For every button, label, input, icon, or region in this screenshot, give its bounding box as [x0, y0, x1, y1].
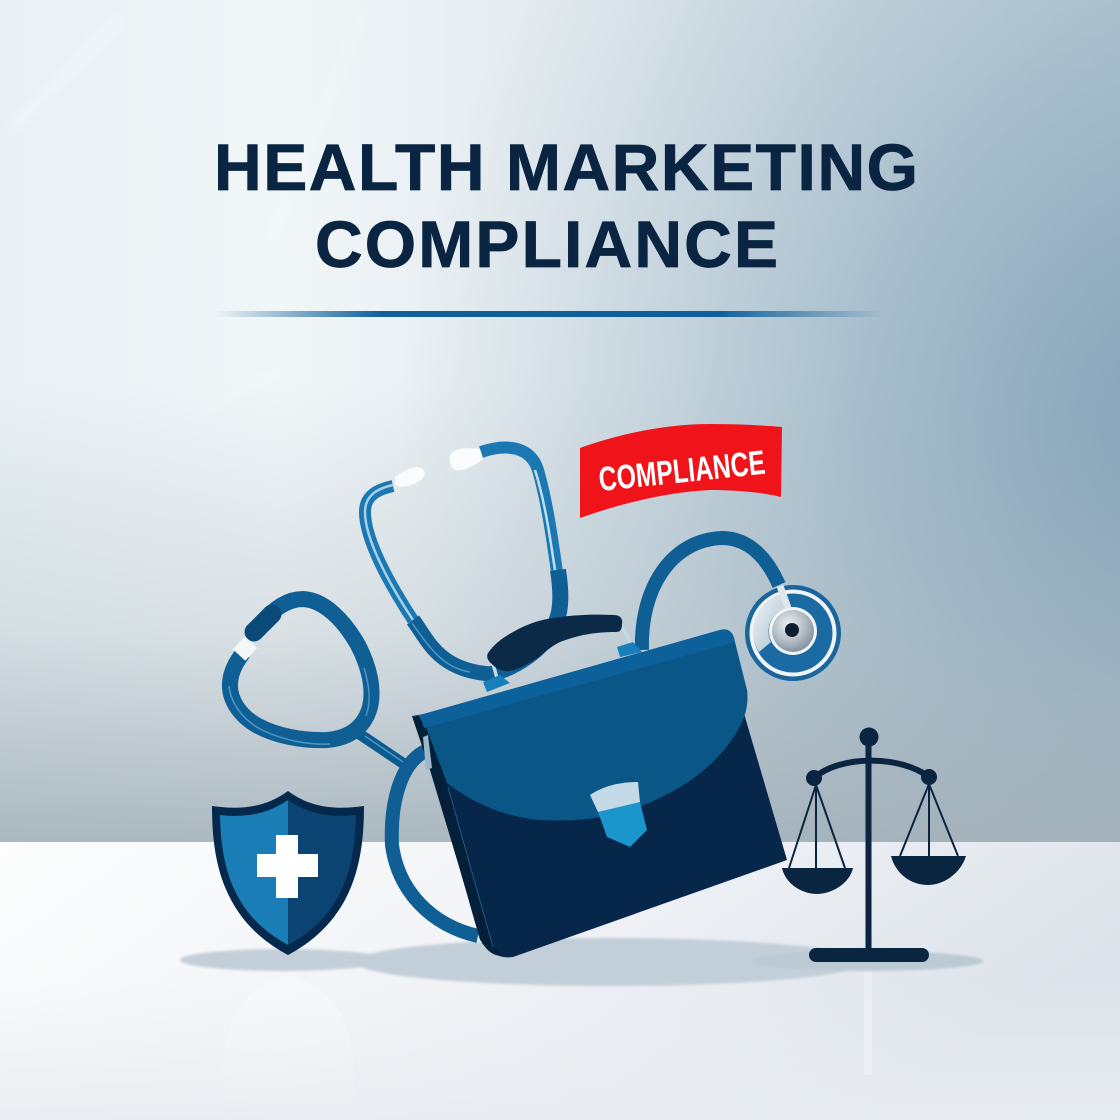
strap buckle: [423, 735, 432, 770]
chest piece: [745, 585, 841, 681]
side highlight line: [448, 787, 493, 947]
clasp: [590, 782, 647, 847]
bag body: [418, 700, 787, 957]
ear tips: [395, 448, 483, 486]
title line one: HEALTH MARKETING: [214, 130, 918, 204]
flap top strip: [413, 629, 735, 728]
handle mounts: [483, 642, 642, 692]
title line two: COMPLIANCE: [315, 207, 778, 281]
lower tube loop: [229, 599, 410, 768]
scales of justice icon: [782, 728, 966, 962]
left ear tube: [365, 485, 490, 674]
ground shadows: [180, 938, 983, 986]
title divider: [215, 311, 885, 317]
background wall: [0, 0, 1120, 842]
flap: [413, 629, 748, 820]
briefcase: [412, 615, 787, 957]
bag side: [412, 714, 503, 956]
floor: [0, 842, 1120, 1120]
handle: [487, 615, 622, 671]
strap tube behind bag: [392, 750, 478, 936]
compliance flag: COMPLIANCE: [597, 444, 767, 499]
handle rings: [492, 624, 634, 682]
compliance flag: [580, 424, 782, 518]
right ear tube: [481, 448, 560, 675]
shield icon: [212, 791, 364, 955]
chest tube: [642, 538, 779, 650]
stethoscope: [229, 448, 779, 936]
